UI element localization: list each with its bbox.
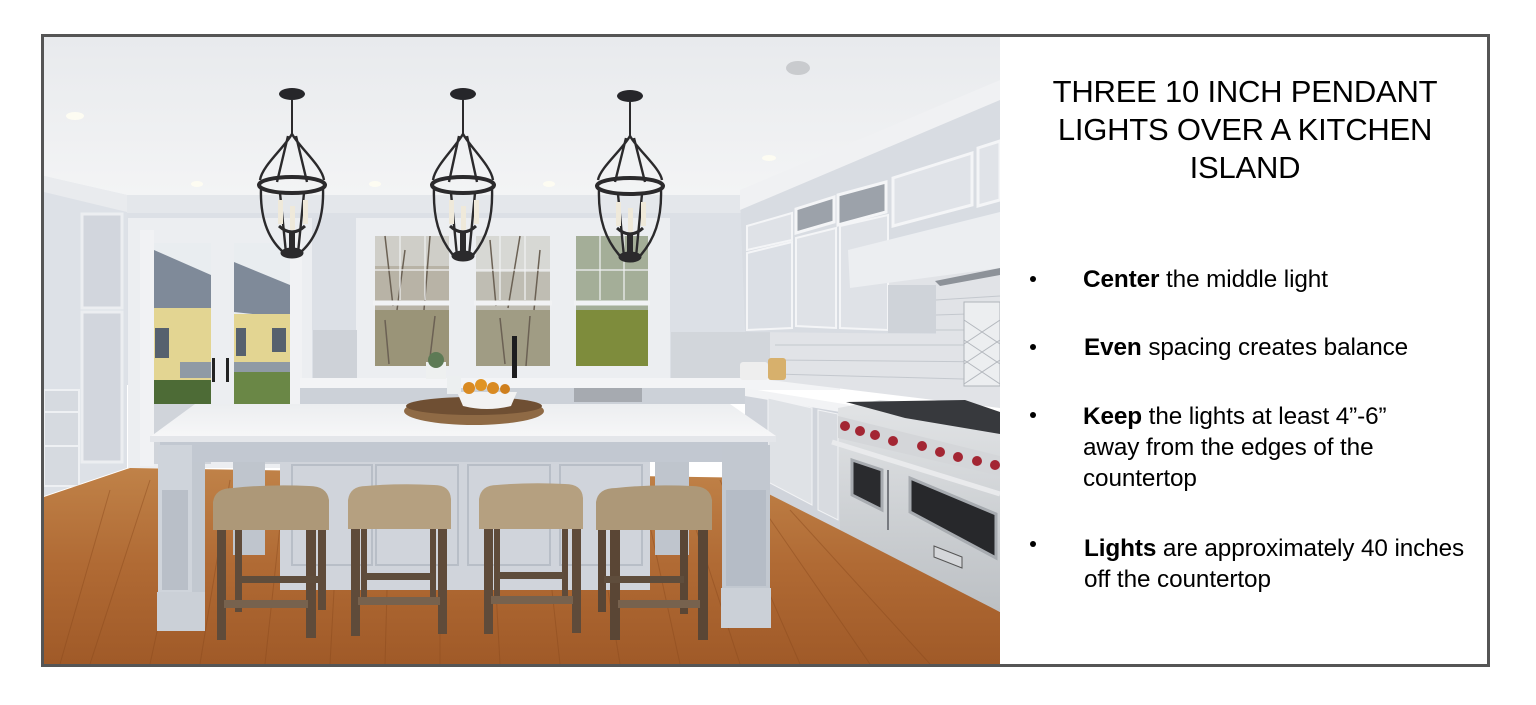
stool 1	[213, 485, 329, 640]
heading: LIGHTS OVER A KITCHEN	[1058, 112, 1432, 147]
back wall	[127, 195, 747, 385]
bullet marker: keep	[1030, 412, 1036, 418]
back backsplash	[300, 330, 840, 404]
right backsplash	[740, 262, 1000, 408]
pendant light: middle	[432, 88, 494, 261]
text: lights height	[1084, 535, 1464, 593]
stool 4	[596, 485, 712, 640]
text: keep lights away from edges	[1083, 403, 1387, 492]
pendant light: right	[597, 90, 663, 262]
fruit basket	[404, 376, 544, 425]
text: keep lights away from edges: countertop	[1083, 465, 1197, 492]
floor	[44, 468, 1000, 664]
island leg: left	[157, 445, 205, 631]
right upper cabinets	[740, 80, 1000, 334]
ceiling	[44, 37, 1000, 195]
pendant light: left	[259, 88, 325, 258]
text: keep lights away from edges: away from the edges of the	[1083, 434, 1373, 461]
photo: kitchen with island and three pendant lights	[44, 37, 1000, 664]
left tall cabinets	[44, 176, 127, 496]
text: even spacing: Even spacing creates balance	[1084, 334, 1408, 361]
bullet marker: even	[1030, 344, 1036, 350]
crown molding	[127, 195, 742, 213]
stool 3	[479, 483, 583, 634]
island	[150, 404, 776, 631]
range	[832, 400, 1000, 612]
text: center the middle light: Center the middle light	[1083, 266, 1328, 293]
text: lights height: Lights are approximately 40 inches	[1084, 535, 1464, 562]
text: keep lights away from edges: Keep the lights at least 4”-6”	[1083, 403, 1387, 430]
french doors	[128, 218, 312, 468]
bullet marker: center	[1030, 276, 1036, 282]
heading	[1053, 74, 1437, 185]
right base cabinets	[745, 388, 850, 530]
stool 2	[348, 484, 451, 636]
ceiling recessed lights	[66, 61, 810, 187]
range hood	[848, 212, 1000, 288]
windows	[356, 218, 670, 378]
heading: THREE 10 INCH PENDANT	[1053, 74, 1437, 109]
bullet marker: lights	[1030, 541, 1036, 547]
text: lights height: off the countertop	[1084, 566, 1271, 593]
heading: ISLAND	[1190, 150, 1300, 185]
island leg: right	[721, 445, 771, 628]
